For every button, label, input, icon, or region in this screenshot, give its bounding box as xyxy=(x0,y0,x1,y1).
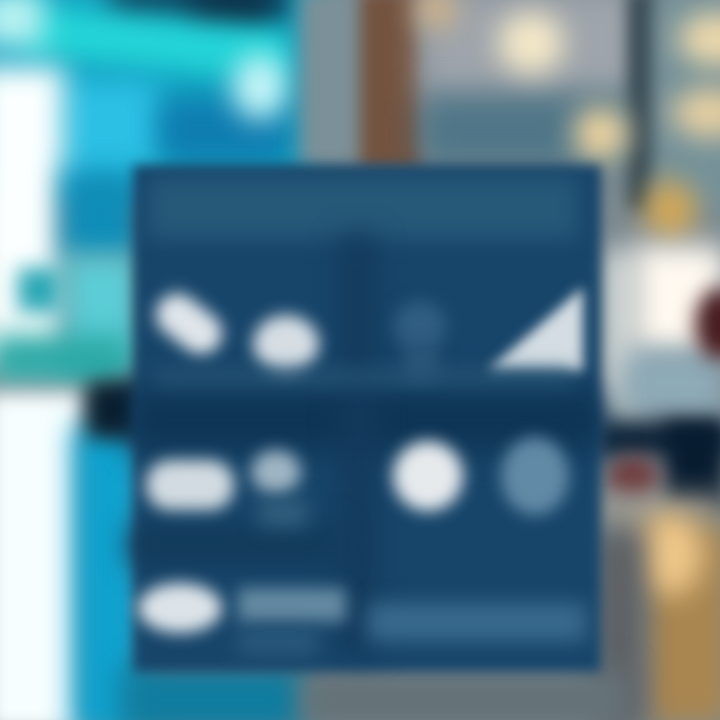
text block: top row captions xyxy=(153,370,573,384)
icon: top row rising triangle chart xyxy=(484,282,592,380)
icon: bottom row cloud xyxy=(138,583,222,633)
icon: middle row small badge xyxy=(241,439,312,533)
background: right side figure and glow xyxy=(597,224,720,720)
icon: top row satellite shape xyxy=(148,285,230,363)
icon: middle row pill xyxy=(146,460,234,510)
panel: main navy infographic card xyxy=(110,156,628,680)
icon: top row cloud shape xyxy=(253,315,319,373)
icon: ceiling light spots xyxy=(402,0,720,248)
icon: middle row bright circle xyxy=(393,441,463,511)
background: floor strip xyxy=(300,670,630,720)
icon: top row faint person xyxy=(392,299,448,373)
background: pillar and ceiling lights xyxy=(286,0,720,248)
text block: bottom right caption xyxy=(360,595,592,649)
icon: middle row globe xyxy=(501,437,569,515)
text block: bottom left caption xyxy=(238,588,346,622)
heading: blurred title band xyxy=(148,177,578,239)
background: left cyan wall xyxy=(0,0,320,720)
